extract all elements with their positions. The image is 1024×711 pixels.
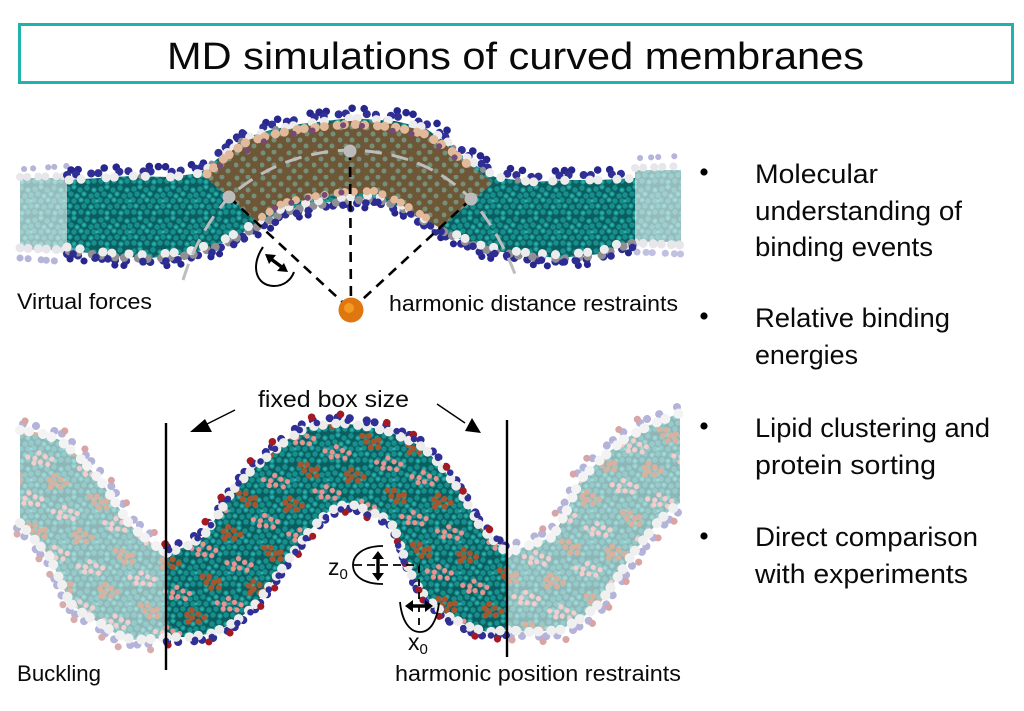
central membrane band <box>167 423 507 637</box>
faded periodic image right <box>635 156 681 254</box>
bullet: relative binding energies <box>700 303 950 370</box>
bullet: molecular understanding <box>700 159 963 262</box>
membrane band teal <box>67 118 635 258</box>
highlighted curved wedge <box>203 121 493 228</box>
bullet: direct comparison: with experiments <box>754 559 968 589</box>
icon: orange center bead <box>338 298 364 322</box>
headgroup beads upper <box>67 108 639 182</box>
label: fixed box size: fixed box size <box>258 386 409 412</box>
arrow right <box>437 404 481 433</box>
distance restraint lines <box>229 150 471 310</box>
label: z0: z <box>328 554 340 580</box>
bullet: direct comparison <box>700 522 978 589</box>
icon: harmonic potential upper <box>256 247 294 286</box>
icon: x0 harmonic restraint <box>400 566 439 632</box>
label: z0: 0 <box>340 566 348 583</box>
label: x0: 0 <box>420 641 428 658</box>
bullet: molecular understanding: binding events <box>755 232 933 262</box>
bullet: lipid clustering <box>700 413 990 480</box>
box wall right <box>506 420 508 657</box>
bullet: relative binding energies: Relative binding <box>755 303 950 333</box>
headgroup beads lower <box>67 195 641 267</box>
arrow left <box>190 410 235 432</box>
label: buckling: Buckling <box>17 661 101 686</box>
membrane: virtual forces simulation <box>20 108 681 282</box>
bullet: molecular understanding: understanding of <box>755 196 963 226</box>
reference arc <box>183 150 518 282</box>
box wall left <box>165 423 167 670</box>
headgroup beads <box>165 414 509 645</box>
membrane: buckling simulation <box>17 403 685 651</box>
lipid clusters <box>167 423 507 637</box>
label: harmonic position restraints: harmonic position restraints <box>395 661 681 686</box>
icon: z0 harmonic restraint <box>353 546 420 584</box>
bullet: direct comparison: Direct comparison <box>755 522 978 552</box>
faded periodic image left <box>20 166 67 262</box>
bullet list <box>700 159 990 589</box>
faded periodic image right <box>502 403 685 642</box>
bullet: molecular understanding: Molecular <box>755 159 878 189</box>
restraint anchor dots <box>222 144 478 206</box>
faded periodic image left <box>17 421 172 651</box>
bullet: relative binding energies: energies <box>755 340 858 370</box>
label: harmonic distance restraints: harmonic distance restraints <box>389 291 678 316</box>
label: x0: x <box>408 629 420 655</box>
title box <box>20 24 1012 82</box>
label: virtual forces: Virtual forces <box>17 289 152 314</box>
bullet: lipid clustering: Lipid clustering and <box>755 413 990 443</box>
bullet: lipid clustering: protein sorting <box>755 450 936 480</box>
title: MD simulations of curved membranes <box>167 36 864 78</box>
